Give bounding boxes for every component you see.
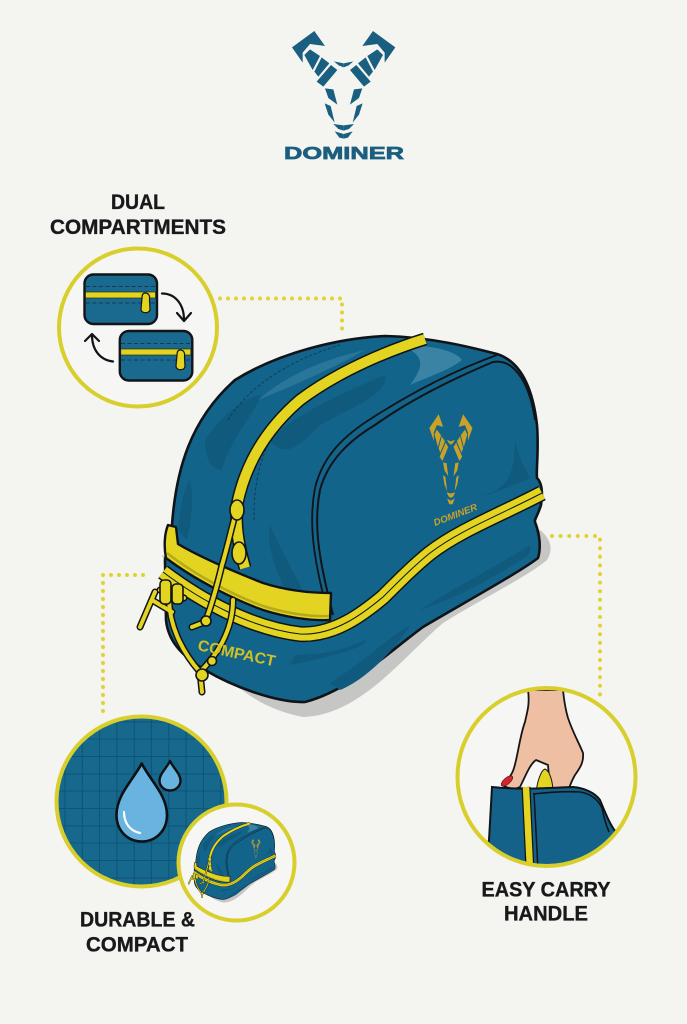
heading: durable and compact: DURABLE &	[80, 908, 195, 932]
main bag illustration	[140, 336, 551, 717]
panel: easy carry handle circle	[458, 688, 636, 880]
heading: dual compartments	[50, 191, 226, 239]
arrow: up	[85, 334, 113, 362]
bag zipper	[526, 787, 530, 870]
connector: handle to bag	[552, 536, 600, 698]
handle	[536, 768, 554, 788]
heading: easy carry handle: HANDLE	[504, 902, 588, 926]
bag top with handle held	[488, 690, 616, 864]
panel: compact bag circle	[178, 804, 294, 920]
heading: dual compartments: DUAL	[111, 191, 165, 214]
bag top	[488, 786, 616, 864]
nail	[500, 776, 514, 786]
panel: durable fabric circle	[50, 710, 235, 890]
icon: small water drop	[160, 761, 180, 790]
heading: durable and compact	[80, 908, 195, 956]
connector: durable to bag	[103, 575, 143, 718]
bag compact text: COMPACT	[196, 637, 277, 670]
bag brand text: DOMINER	[432, 502, 479, 529]
fabric grid	[59, 719, 224, 884]
heading: dual compartments: COMPARTMENTS	[50, 216, 226, 239]
heading: easy carry handle: EASY CARRY	[482, 878, 610, 902]
icon: upper pouch	[84, 274, 157, 324]
arrow: down	[162, 294, 191, 321]
infographic canvas	[50, 31, 638, 952]
brand logo	[284, 31, 405, 163]
icon: lower pouch	[120, 331, 192, 380]
heading: easy carry handle	[482, 878, 610, 926]
panel: dual compartments circle	[59, 248, 217, 406]
heading: durable and compact: COMPACT	[86, 934, 188, 956]
hand	[502, 690, 583, 790]
mini bag illustration	[189, 823, 277, 903]
brand name: DOMINER	[284, 143, 405, 163]
connector: compartments to bag	[220, 298, 342, 332]
icon: large water drop	[116, 764, 167, 842]
